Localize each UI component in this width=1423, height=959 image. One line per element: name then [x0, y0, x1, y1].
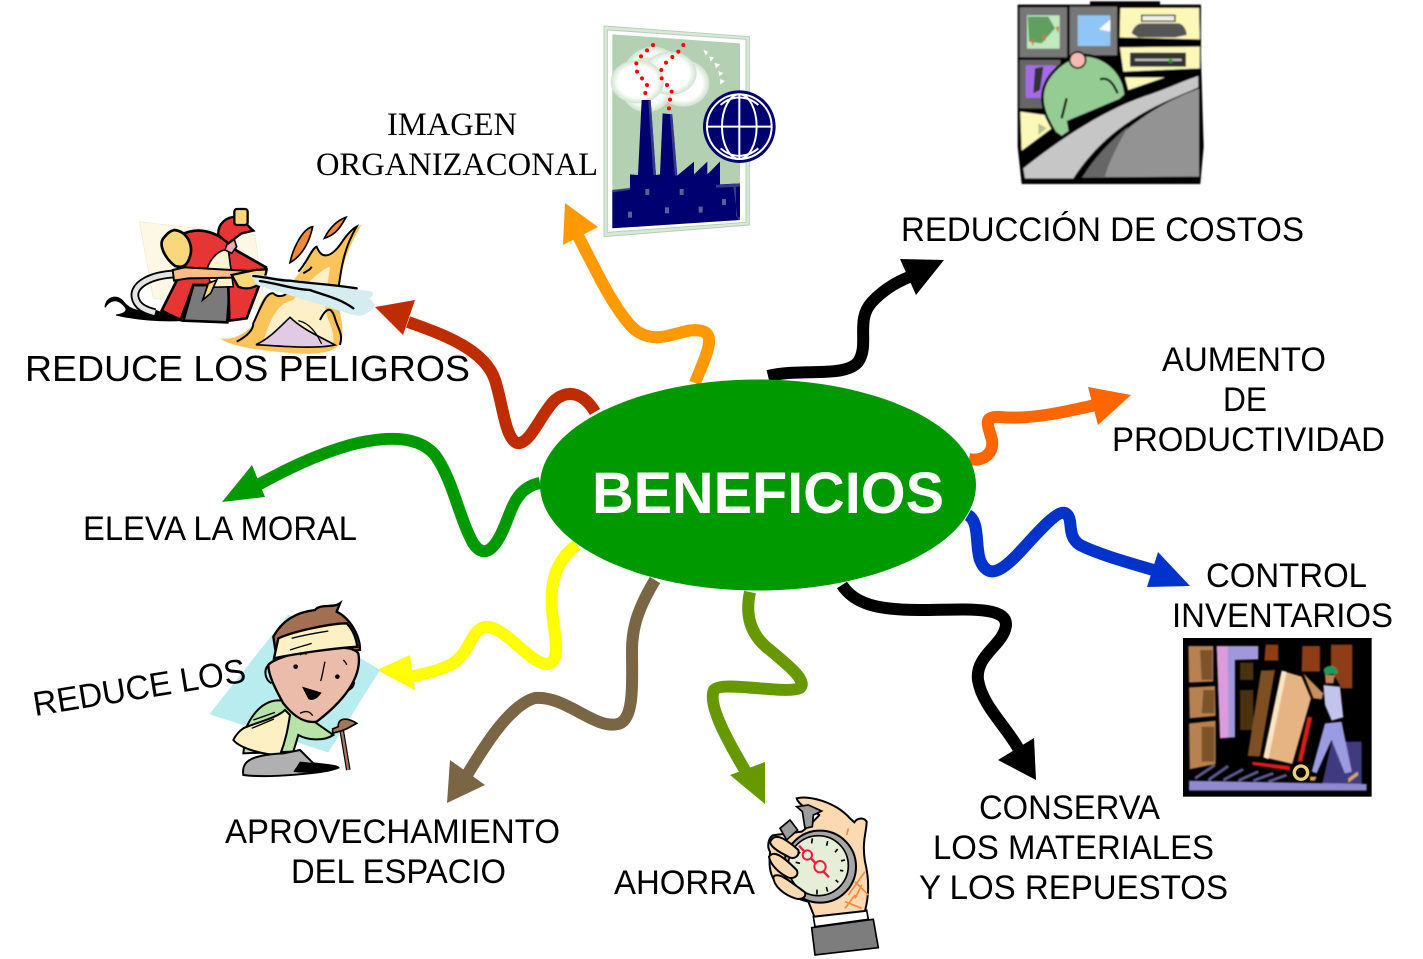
label: reduce los (rotated): REDUCE LOS	[30, 652, 249, 724]
arrow: black to reduccion de costos	[768, 259, 944, 376]
label: aumento de productividad: PRODUCTIVIDAD	[1112, 421, 1385, 459]
icon: hand holding stopwatch	[768, 797, 878, 955]
label: control inventarios: INVENTARIOS	[1172, 597, 1393, 635]
label: control inventarios	[1172, 557, 1393, 635]
label: conserva los materiales y los repuestos	[919, 789, 1228, 907]
label: aprovechamiento del espacio: APROVECHAMIENTO	[225, 813, 560, 851]
icon: injured man with bandage	[209, 603, 380, 776]
label: aumento de productividad	[1112, 341, 1385, 459]
arrow: red to reduce los peligros	[375, 300, 595, 443]
label: conserva los materiales y los repuestos: CONSERVA	[979, 789, 1160, 827]
icon: firefighter and fire	[105, 209, 375, 354]
label: eleva la moral: ELEVA LA MORAL	[83, 510, 357, 548]
label: ahorra: AHORRA	[614, 864, 755, 902]
label: aprovechamiento del espacio	[225, 813, 560, 891]
label: imagen organizaconal: IMAGEN	[387, 107, 517, 143]
label: imagen organizaconal	[316, 107, 598, 183]
label: control inventarios: CONTROL	[1206, 557, 1367, 595]
label: aprovechamiento del espacio: DEL ESPACIO	[291, 853, 506, 891]
icon: factory with globe	[604, 26, 776, 237]
central node: beneficios: BENEFICIOS	[592, 461, 944, 526]
arrow: brown to aprovechamiento del espacio	[447, 580, 655, 803]
label: aumento de productividad: AUMENTO	[1162, 341, 1326, 379]
arrow: yellow to reduce los accidentes	[377, 545, 577, 690]
arrow: olive green to ahorra	[713, 592, 802, 804]
arrow: black to conserva los materiales	[842, 585, 1036, 780]
arrow: green to eleva la moral	[222, 439, 540, 551]
icon: control room operator	[1018, 1, 1204, 184]
arrow: orange to imagen organizacional	[563, 203, 709, 383]
label: imagen organizaconal: ORGANIZACONAL	[316, 147, 598, 183]
label: conserva los materiales y los repuestos: Y LOS REPUESTOS	[919, 869, 1228, 907]
label: conserva los materiales y los repuestos: LOS MATERIALES	[933, 829, 1214, 867]
label: aumento de productividad: DE	[1223, 381, 1267, 419]
central node: beneficios	[540, 380, 976, 590]
icon: warehouse worker with hand truck	[1183, 638, 1372, 797]
label: reduccion de costos: REDUCCIÓN DE COSTOS	[901, 211, 1304, 249]
arrow: blue to control inventarios	[968, 513, 1190, 587]
label: reduce los peligros: REDUCE LOS PELIGROS	[25, 348, 470, 389]
arrow: orange-red to aumento de productividad	[969, 387, 1131, 460]
